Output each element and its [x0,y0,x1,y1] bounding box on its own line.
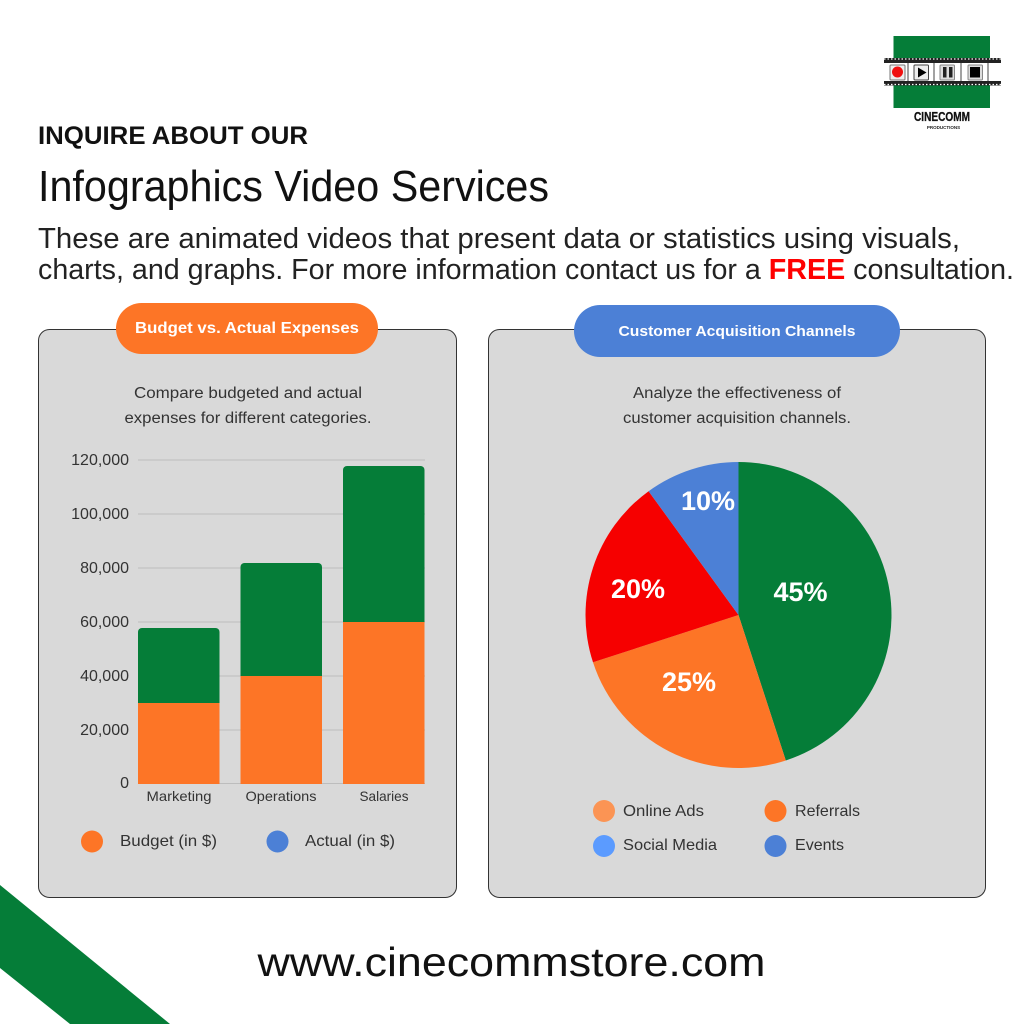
panel description: expenses for different categories. [124,410,372,427]
legend: pie chart: Events [795,837,844,854]
heading pill: budget vs actual [116,303,378,354]
pie labels: 45% [773,577,828,607]
legend: pie chart: Social Media [623,837,717,854]
panel: customer acquisition channels [488,305,986,898]
panel description: Compare budgeted and actual [134,385,362,402]
y axis labels: 120,000 [71,452,129,469]
pie chart [586,462,891,768]
panel description: customer acquisition channels. [623,410,851,427]
pie labels: 20% [611,574,665,604]
logo: Cinecomm: PRODUCTIONS [927,125,960,130]
legend: pie chart [593,800,860,857]
main title: Infographics Video Services [38,162,549,211]
y axis labels: 0 [120,775,129,792]
pie labels [611,486,828,697]
logo: Cinecomm [884,36,1001,130]
legend: bar chart: Actual (in $) [305,833,395,850]
website url: www.cinecommstore.com [256,939,766,985]
bar: marketing [138,628,220,784]
panel description [124,385,372,427]
corner accent: green diagonal stripe [0,885,170,1024]
legend: bar chart [81,830,395,852]
pie labels: 25% [662,667,716,697]
intro paragraph: charts, and graphs. For more information contact us for a FREE consultation. [38,254,1014,286]
heading pill: customer acquisition [574,305,900,357]
x axis labels: Marketing [146,788,212,804]
logo: Cinecomm: CINECOMM [914,109,970,124]
x axis labels [146,788,408,804]
heading pill: customer acquisition: Customer Acquisition Channels [618,323,856,340]
y axis labels [71,452,129,792]
eyebrow heading: INQUIRE ABOUT OUR [38,122,308,150]
bar: salaries [343,466,424,784]
stacked bar chart [71,452,425,804]
pie labels: 10% [681,486,735,516]
legend: pie chart: Online Ads [623,803,704,820]
panel: budget vs actual expenses [38,303,456,898]
x axis labels: Operations [246,788,316,804]
legend: bar chart: Budget (in $) [120,833,217,850]
y axis labels: 100,000 [71,506,129,523]
y axis labels: 60,000 [80,614,129,631]
panel description [623,385,851,427]
heading pill: budget vs actual: Budget vs. Actual Expenses [135,320,359,337]
y axis labels: 20,000 [80,722,129,739]
x axis labels: Salaries [360,788,408,804]
bar: operations [240,563,322,784]
intro paragraph [38,223,1014,286]
y axis labels: 40,000 [80,668,129,685]
panel description: Analyze the effectiveness of [633,385,842,402]
y axis labels: 80,000 [80,560,129,577]
intro paragraph: These are animated videos that present data or statistics using visuals, [38,223,960,255]
legend: pie chart: Referrals [795,803,860,820]
